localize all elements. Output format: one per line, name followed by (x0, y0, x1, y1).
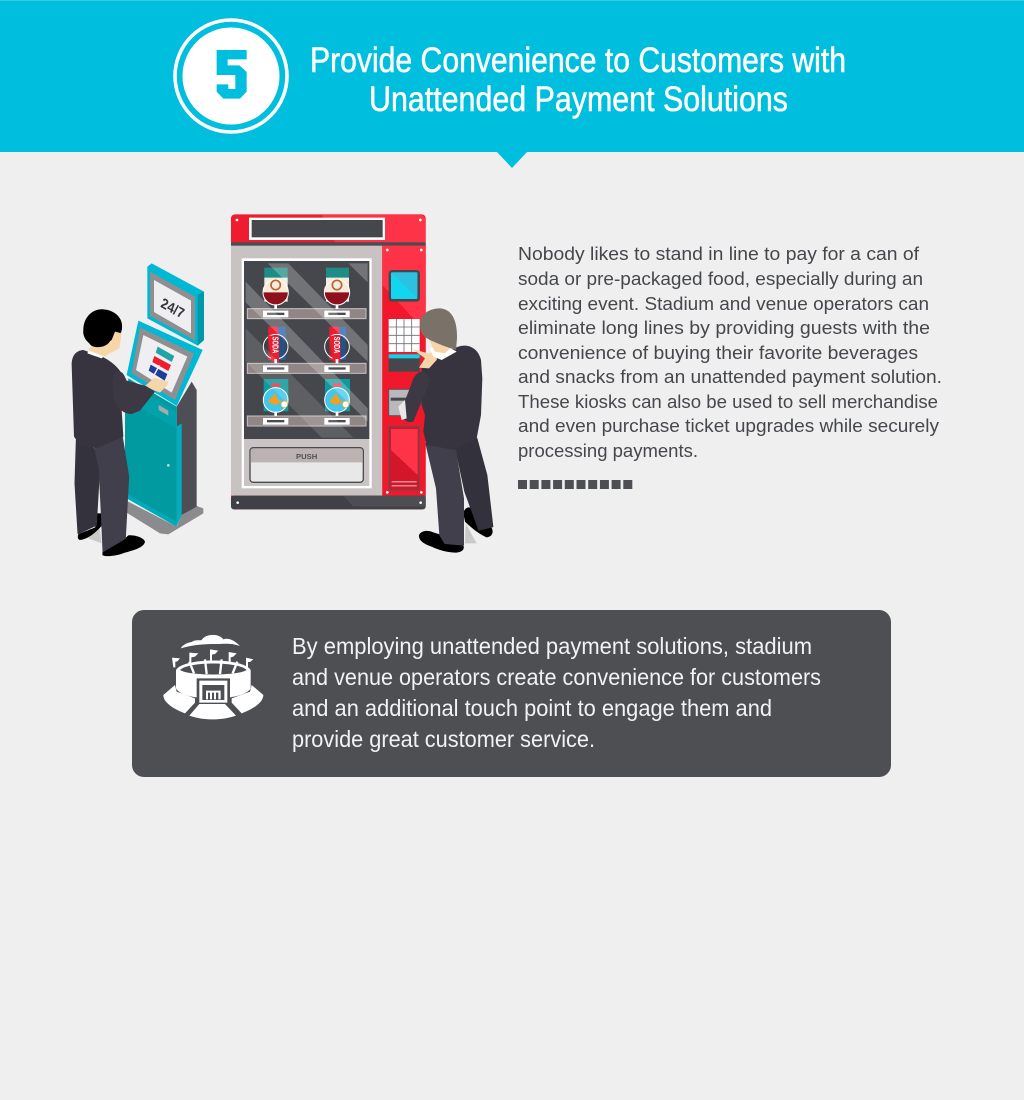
dotted divider (518, 480, 632, 489)
callout panel (132, 610, 891, 777)
body paragraph: and even purchase ticket upgrades while securely (518, 416, 939, 436)
glass reflections (246, 263, 368, 438)
push door (250, 448, 363, 482)
title: Unattended Payment Solutions (369, 80, 788, 119)
number badge: 5 (175, 20, 287, 132)
illustration: vending machine: SODA (332, 337, 341, 353)
products: soda cans (263, 327, 288, 363)
body paragraph: Nobody likes to stand in line to pay for a can of (518, 244, 920, 264)
illustration: kiosk: 24/7 (159, 294, 187, 322)
title: Provide Convenience to Customers with (310, 41, 846, 80)
shelves (247, 309, 366, 426)
figure: man at kiosk (72, 309, 168, 556)
body paragraph: soda or pre-packaged food, especially during an (518, 269, 923, 289)
body paragraph: eliminate long lines by providing guests with the (518, 318, 930, 338)
products: pretzel bags (263, 268, 288, 309)
callout text: provide great customer service. (292, 726, 595, 752)
callout text: and an additional touch point to engage them and (292, 695, 772, 721)
payment panel (382, 246, 426, 496)
body paragraph: These kiosks can also be used to sell merchandise (518, 392, 938, 412)
header banner (0, 0, 1024, 168)
illustration: kiosk (72, 263, 204, 556)
push door: PUSH (296, 452, 318, 461)
body paragraph: and snacks from an unattended payment solution. (518, 367, 942, 387)
title (310, 41, 846, 119)
body paragraph: processing payments. (518, 441, 698, 461)
icon: stadium (163, 635, 263, 719)
products: fish snack bags (263, 379, 288, 416)
products: soda cans: SODA (271, 337, 280, 353)
body paragraph (518, 244, 942, 461)
callout text: By employing unattended payment solutions, stadium (292, 633, 812, 659)
callout text: and venue operators create convenience for customers (292, 664, 821, 690)
body paragraph: convenience of buying their favorite beverages (518, 343, 918, 363)
illustration: vending machine (231, 214, 493, 553)
figure: man at vending machine (398, 308, 493, 553)
callout text (292, 633, 821, 752)
screws (236, 219, 423, 504)
body paragraph: exciting event. Stadium and venue operators can (518, 294, 929, 314)
